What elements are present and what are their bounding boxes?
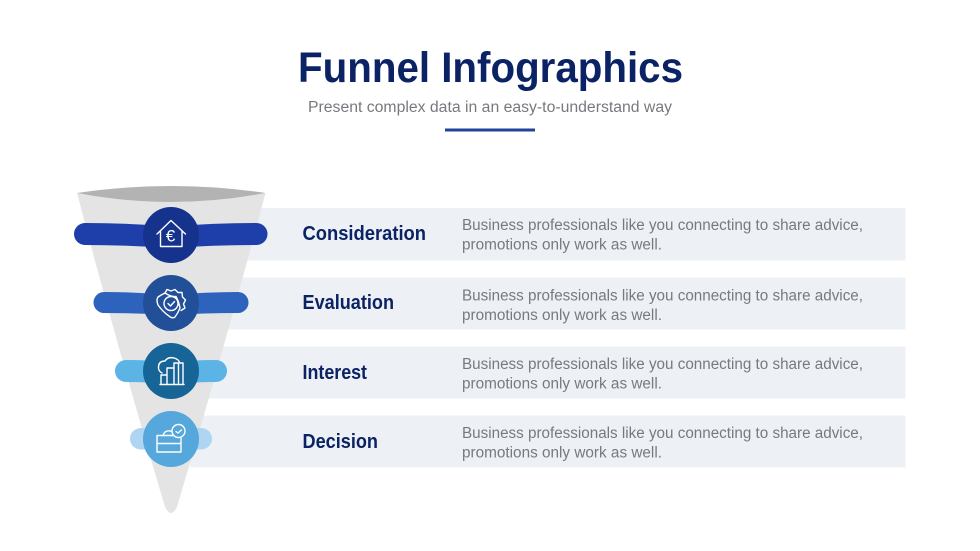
heading: consideration: Consideration [302,223,426,245]
band: consideration [74,223,268,248]
heading: decision: Decision [302,431,378,453]
text block: consideration description [462,217,863,254]
text block: interest description: promotions only work as well. [462,376,662,392]
text block: consideration description: Business professionals like you connecting to share advice, [462,217,863,234]
text block: interest description: Business professionals like you connecting to share advice, [462,356,863,373]
panel: interest row [205,346,906,398]
heading: interest: Interest [302,362,367,384]
title: Funnel Infographics [298,44,683,92]
funnel opening [77,186,266,202]
panel: evaluation row [225,278,906,330]
band: evaluation [94,292,249,315]
icon: euro house: € [166,226,176,246]
text block: evaluation description: promotions only work as well. [462,307,662,324]
band: interest [115,360,227,384]
icon: card with check [143,411,199,467]
subtitle: Present complex data in an easy-to-understand way [308,99,672,116]
text block: consideration description: promotions only work as well. [462,236,662,254]
panel: consideration row [240,208,906,260]
funnel body [77,193,266,513]
title underline [445,128,535,132]
text block: evaluation description: Business professionals like you connecting to share advice, [462,288,863,304]
text block: interest description [462,356,863,392]
icon: gear with check [143,275,199,331]
text block: evaluation description [462,288,863,324]
icon: euro house [143,207,199,263]
panel: decision row [190,416,906,468]
text block: decision description: Business professionals like you connecting to share advice, [462,425,863,442]
band: decision [130,428,212,450]
heading: evaluation: Evaluation [302,292,394,314]
icon: cloud with bar chart [143,343,199,399]
text block: decision description [462,425,863,462]
text block: decision description: promotions only work as well. [462,444,662,462]
